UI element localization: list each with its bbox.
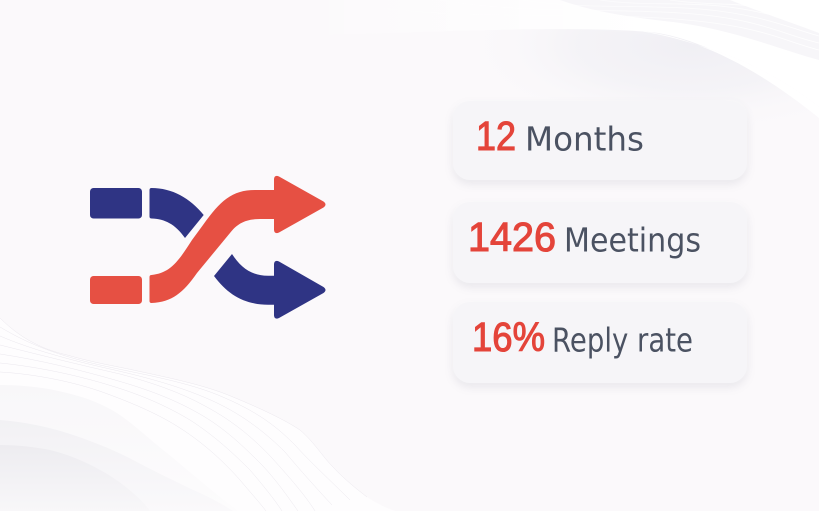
label: Meetings: Meetings (564, 220, 701, 260)
blue upper curve segment (150, 188, 204, 238)
red crossing arrow (150, 176, 326, 303)
stat card: 12 Months (453, 101, 747, 180)
label: Months: Months (525, 120, 644, 158)
blue lower arrow (214, 254, 326, 319)
blue top-left block (90, 188, 142, 218)
red bottom-left block (90, 276, 142, 304)
stat card: 1426 Meetings (453, 202, 747, 283)
stat card: 16% Reply rate (453, 302, 747, 383)
value: 12: 12 (476, 113, 516, 159)
value: 16%: 16% (472, 314, 545, 360)
value: 1426: 1426 (468, 214, 556, 260)
label: Reply rate: Reply rate (552, 320, 693, 360)
